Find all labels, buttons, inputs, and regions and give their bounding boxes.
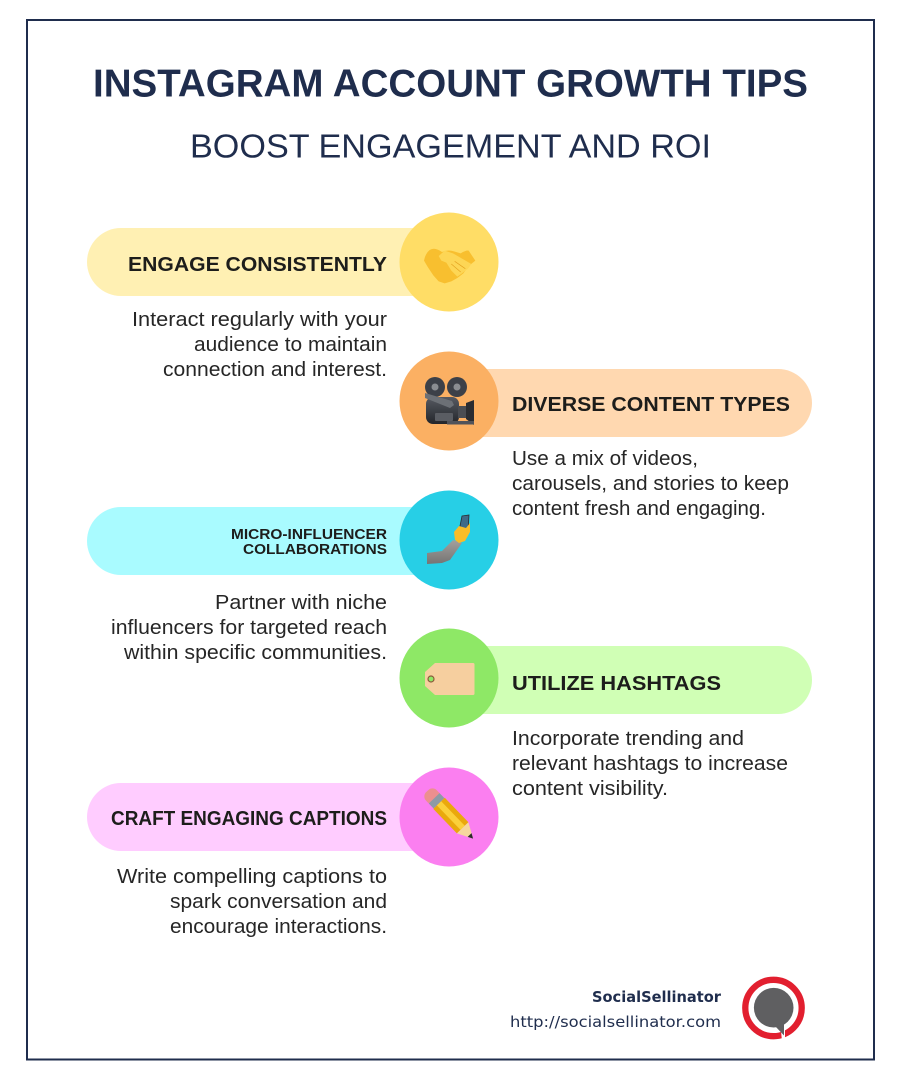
text: micro-influencer collaborations: influencers for targeted reach	[111, 617, 387, 639]
text: engage consistently	[132, 309, 387, 381]
text: utilize hashtags: content visibility.	[512, 778, 668, 800]
text: engage consistently: audience to maintain	[194, 334, 387, 356]
text: utilize hashtags	[512, 728, 788, 800]
heading: engage consistently: ENGAGE CONSISTENTLY	[128, 253, 387, 276]
text: craft engaging captions: spark conversation and	[170, 891, 387, 913]
heading: micro-influencer collaborations: MICRO-INFLUENCER	[231, 527, 388, 543]
logo	[745, 980, 802, 1041]
heading: utilize hashtags: UTILIZE HASHTAGS	[512, 672, 721, 695]
footer url: http://socialsellinator.com	[510, 1013, 721, 1031]
text: engage consistently: Interact regularly with your	[132, 309, 387, 331]
circle: engage consistently	[400, 212, 498, 312]
pill: utilize hashtags	[432, 646, 812, 714]
text: micro-influencer collaborations: within specific communities.	[123, 642, 387, 664]
text: diverse content types: carousels, and stories to keep	[512, 473, 789, 495]
pill: craft engaging captions	[87, 783, 467, 851]
text: utilize hashtags: Incorporate trending and	[512, 728, 744, 750]
text: craft engaging captions	[117, 866, 387, 938]
text: diverse content types: content fresh and engaging.	[512, 498, 766, 520]
panel: micro-influencer collaborations	[87, 490, 498, 664]
panel: diverse content types	[400, 352, 812, 520]
pill: micro-influencer collaborations	[87, 507, 467, 575]
circle: micro-influencer collaborations	[400, 490, 498, 590]
circle: craft engaging captions	[400, 768, 498, 866]
icon: label tag	[425, 663, 474, 695]
subtitle: BOOST ENGAGEMENT AND ROI	[190, 128, 711, 166]
text: craft engaging captions: encourage interactions.	[170, 916, 387, 938]
text: engage consistently: connection and interest.	[163, 359, 387, 381]
pill: diverse content types	[432, 369, 812, 437]
pill: engage consistently	[87, 228, 467, 296]
text: micro-influencer collaborations	[111, 592, 387, 664]
text: utilize hashtags: relevant hashtags to increase	[512, 753, 788, 775]
heading: micro-influencer collaborations: COLLABORATIONS	[243, 542, 387, 558]
heading: diverse content types: DIVERSE CONTENT TYPES	[512, 393, 790, 416]
icon: movie camera	[425, 377, 474, 425]
heading: craft engaging captions: CRAFT ENGAGING CAPTIONS	[111, 807, 387, 830]
footer brand name: SocialSellinator	[592, 988, 722, 1006]
panel: engage consistently	[87, 212, 498, 381]
text: diverse content types	[512, 448, 789, 520]
circle: diverse content types	[400, 352, 498, 450]
title: INSTAGRAM ACCOUNT GROWTH TIPS	[93, 62, 808, 106]
text: micro-influencer collaborations: Partner with niche	[215, 592, 387, 614]
icon: pencil	[421, 786, 479, 844]
panel: craft engaging captions	[87, 768, 498, 938]
icon: handshake	[424, 249, 475, 283]
heading: micro-influencer collaborations	[231, 527, 388, 558]
text: craft engaging captions: Write compelling captions to	[117, 866, 387, 888]
panel: utilize hashtags	[400, 628, 812, 800]
text: diverse content types: Use a mix of videos,	[512, 448, 698, 470]
icon: selfie arm	[427, 515, 470, 564]
circle: utilize hashtags	[400, 628, 498, 728]
